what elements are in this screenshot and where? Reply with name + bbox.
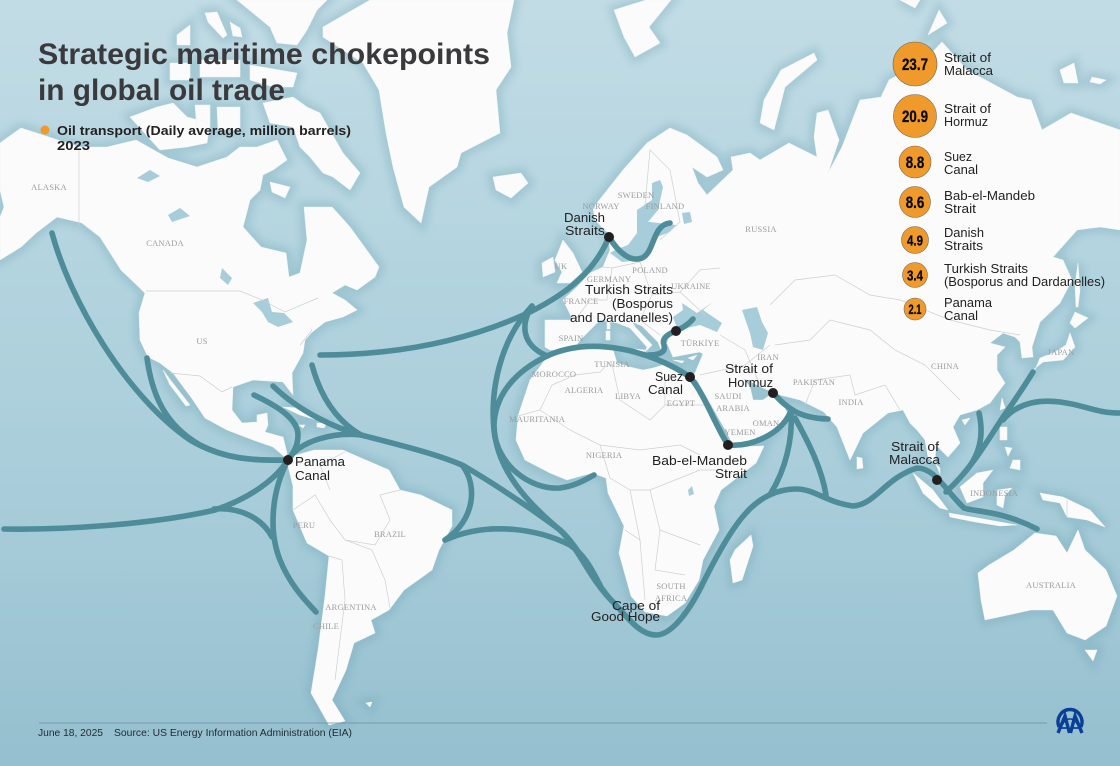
route: Gulf of Mexico to Panama	[254, 395, 298, 460]
marker: Turkish Straits	[671, 326, 681, 336]
route: Black Sea to Mediterranean	[648, 319, 693, 355]
label: Strait of Malacca	[889, 440, 940, 467]
country labels: ARGENTINA	[325, 602, 377, 612]
label: Bab-el-Mandeb Strait	[652, 454, 748, 481]
country labels: JAPAN	[1048, 347, 1074, 357]
item: Strait of Hormuz 20.9: Hormuz	[944, 115, 988, 129]
marker: Suez Canal	[685, 372, 695, 382]
label: Strait of Malacca: Malacca	[889, 453, 940, 467]
country labels: POLAND	[632, 265, 668, 275]
label: Bab-el-Mandeb Strait: Strait	[715, 467, 748, 481]
route: Arabian Sea to Indian Ocean	[795, 418, 826, 495]
country labels: FRANCE	[564, 296, 598, 306]
country labels: UK	[555, 261, 568, 271]
country labels: AFRICA	[655, 593, 688, 603]
title: Strategic maritime chokepoints	[38, 38, 490, 71]
country labels: ALASKA	[31, 182, 67, 192]
item: Strait of Malacca 23.7: Strait of	[944, 51, 992, 65]
route: Philippine Sea to Pacific	[1003, 401, 1120, 420]
country labels: CANADA	[146, 238, 184, 248]
label: Strait of Malacca: Strait of	[891, 440, 940, 454]
label: Cape of Good Hope: Cape of	[612, 599, 661, 613]
country labels: BRAZIL	[374, 529, 406, 539]
item: Danish Straits 4.9: 4.9	[907, 232, 923, 250]
label: Bab-el-Mandeb Strait: Bab-el-Mandeb	[652, 454, 747, 468]
country labels: LIBYA	[615, 391, 642, 401]
label: Danish Straits	[564, 211, 605, 238]
label: Suez Canal: Canal	[648, 383, 683, 397]
label: Danish Straits: Straits	[565, 224, 605, 238]
route: US East Coast to Atlantic corridor	[312, 365, 361, 435]
legend	[40, 123, 351, 153]
route: Atlantic to Brazil	[445, 529, 600, 585]
country labels: IRAN	[757, 352, 779, 362]
label: Strait of Hormuz: Hormuz	[728, 376, 773, 390]
inland water	[137, 170, 768, 496]
item: Strait of Hormuz 20.9: Strait of	[944, 102, 992, 116]
country labels: US	[196, 336, 208, 346]
route: Gulf coast to Cape of Good Hope and Australia	[273, 386, 1037, 635]
route: Malacca to Japan	[946, 372, 1033, 492]
label: Turkish Straits: and Dardanelles)	[570, 311, 673, 325]
country labels: SAUDI	[715, 391, 741, 401]
footer rule	[39, 722, 1047, 724]
legend text: 2023	[57, 138, 90, 153]
country labels: AUSTRALIA	[1026, 580, 1077, 590]
country labels: PERU	[293, 520, 315, 530]
marker: Strait of Malacca	[932, 475, 942, 485]
country labels: OMAN	[753, 418, 779, 428]
item: Bab-el-Mandeb Strait 8.6: 8.6	[906, 194, 924, 212]
route: Europe to Gulf of Guinea	[493, 306, 594, 488]
route: Bab-el-Mandeb to Arabian Sea	[728, 413, 790, 445]
item: Strait of Malacca 23.7	[893, 42, 993, 86]
country labels: TUNISIA	[594, 359, 630, 369]
route: Brazil loop	[445, 465, 472, 540]
item: Panama Canal 2.1	[904, 296, 992, 323]
country labels: CHINA	[931, 361, 960, 371]
country labels: MAURITANIA	[509, 414, 566, 424]
route: Danish Straits to Baltic	[609, 223, 670, 259]
item: Bab-el-Mandeb Strait 8.6: Strait	[944, 202, 977, 216]
legend text	[57, 123, 351, 153]
item: Turkish Straits 3.4: (Bosporus and Dardanelles)	[944, 275, 1105, 289]
route: South China Sea	[965, 413, 981, 472]
route: New York to Danish Straits	[320, 237, 609, 355]
country labels: NORWAY	[582, 201, 620, 211]
item: Suez Canal 8.8: Canal	[944, 163, 978, 177]
title: in global oil trade	[38, 74, 285, 107]
route: Biscay to Gibraltar	[525, 306, 547, 356]
label: Panama Canal: Canal	[295, 469, 330, 483]
item: Bab-el-Mandeb Strait 8.6	[900, 186, 1035, 218]
legend dot	[40, 126, 50, 134]
item: Panama Canal 2.1: Canal	[944, 309, 978, 323]
route: Alaska to Panama	[52, 233, 288, 460]
country labels: INDONESIA	[970, 488, 1019, 498]
country labels: CHILE	[313, 621, 339, 631]
label: Danish Straits: Danish	[564, 211, 605, 225]
label: Cape of Good Hope: Good Hope	[591, 610, 660, 624]
marker: Panama Canal	[283, 455, 293, 465]
label: Suez Canal: Suez	[655, 370, 683, 384]
item: Danish Straits 4.9: Danish	[944, 226, 984, 240]
country labels: EGYPT	[667, 398, 696, 408]
route: Pacific branch to Chile coast	[214, 509, 272, 537]
route: Arabian Sea to Mozambique Channel	[771, 412, 791, 493]
country labels: RUSSIA	[745, 224, 777, 234]
label: Panama Canal: Panama	[295, 455, 345, 469]
country labels: INDIA	[838, 397, 864, 407]
country labels: NIGERIA	[586, 450, 623, 460]
country labels: TÜRKİYE	[681, 338, 719, 348]
route: US West Coast to Panama	[147, 358, 288, 460]
country labels: ALGERIA	[565, 385, 604, 395]
country labels: SWEDEN	[618, 190, 654, 200]
label: Strait of Hormuz: Strait of	[725, 362, 774, 376]
item: Suez Canal 8.8	[899, 146, 978, 178]
label: Panama Canal	[295, 455, 345, 483]
country labels: MOROCCO	[532, 369, 576, 379]
item: Panama Canal 2.1: 2.1	[908, 301, 922, 317]
label: Cape of Good Hope	[591, 599, 661, 624]
footer date and source: June 18, 2025	[38, 727, 103, 739]
label: Suez Canal	[648, 370, 683, 397]
route: Pacific to Panama	[4, 460, 288, 529]
route: Panama to Chile	[273, 460, 316, 612]
label: Turkish Straits	[570, 283, 673, 325]
ranked chokepoint panel	[893, 42, 1105, 323]
marker: Danish Straits	[604, 232, 614, 242]
item: Strait of Hormuz 20.9	[894, 94, 992, 138]
item: Strait of Malacca 23.7: Malacca	[944, 64, 993, 78]
country labels: SPAIN	[559, 333, 583, 343]
marker: Bab-el-Mandeb	[723, 440, 733, 450]
country labels: ARABIA	[716, 403, 751, 413]
country labels: FINLAND	[646, 201, 684, 211]
route: Panama to Atlantic	[288, 434, 361, 460]
country labels: YEMEN	[724, 427, 756, 437]
legend text: Oil transport (Daily average, million barrels)	[57, 123, 351, 138]
country labels: SOUTH	[656, 581, 686, 591]
route: Mediterranean to Cape	[494, 346, 690, 603]
label: Strait of Hormuz	[725, 362, 774, 390]
label: Turkish Straits: Turkish Straits	[585, 283, 673, 297]
country labels: UKRAINE	[671, 281, 711, 291]
item: Suez Canal 8.8: 8.8	[906, 154, 924, 172]
route: Hormuz to India	[773, 393, 828, 419]
route: Suez to Bab-el-Mandeb	[690, 377, 728, 445]
marker: Strait of Hormuz	[768, 388, 778, 398]
item: Strait of Hormuz 20.9: 20.9	[902, 107, 928, 126]
item: Danish Straits 4.9	[902, 226, 984, 254]
country labels	[31, 182, 1077, 631]
item: Strait of Malacca 23.7: 23.7	[902, 55, 928, 74]
shipping routes	[4, 223, 1120, 635]
item: Suez Canal 8.8: Suez	[944, 150, 972, 164]
item: Turkish Straits 3.4: 3.4	[907, 268, 923, 284]
item: Turkish Straits 3.4	[902, 262, 1105, 289]
item: Bab-el-Mandeb Strait 8.6: Bab-el-Mandeb	[944, 189, 1035, 203]
chokepoint map labels	[295, 211, 940, 624]
logo: AA agency mark	[1058, 710, 1082, 733]
footer date and source: Source: US Energy Information Administration (EIA)	[114, 727, 352, 739]
item: Danish Straits 4.9: Straits	[944, 239, 983, 253]
label: Turkish Straits: (Bosporus	[612, 297, 673, 311]
country borders	[79, 150, 1067, 680]
title	[38, 38, 490, 107]
country labels: GERMANY	[587, 274, 631, 284]
item: Panama Canal 2.1: Panama	[944, 296, 992, 310]
country labels: PAKISTAN	[793, 377, 835, 387]
item: Turkish Straits 3.4: Turkish Straits	[944, 262, 1028, 276]
chokepoint markers	[283, 232, 942, 485]
